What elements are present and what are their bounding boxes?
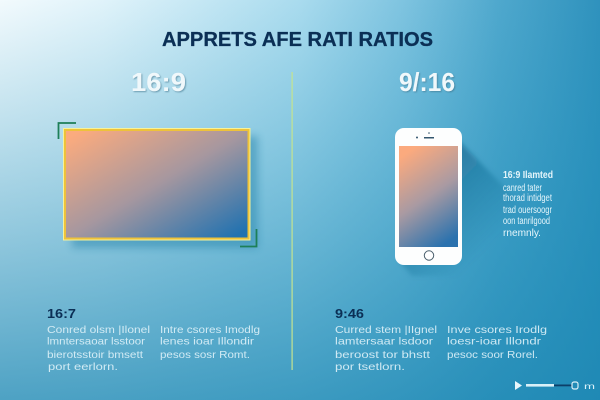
progress fill: [526, 384, 554, 387]
crop corner bottom-right: [240, 229, 256, 246]
right caption column 1: lamtersaar lsdoor: [335, 336, 434, 348]
left caption column 1: [47, 324, 150, 373]
right caption column 2: pesoc soor Rorel.: [447, 349, 538, 361]
landscape shadow: [72, 136, 258, 248]
side note: [503, 170, 553, 239]
right caption column 1: Curred stem |IIgnel: [335, 324, 437, 336]
phone screen: [399, 146, 458, 247]
side note: 16:9 Ilamted: [503, 170, 553, 181]
phone body: [395, 128, 462, 265]
phone home button: [424, 251, 434, 260]
crop corner top-left: [58, 123, 76, 139]
right caption column 2: loesr-ioar Illondr: [447, 336, 542, 348]
title: APPRETS AFE RATI RATIOS: [162, 28, 433, 51]
side note: trad ouersoogr: [503, 205, 552, 216]
heading: 9:16: 9/:16: [399, 67, 455, 97]
left caption column 2: [160, 324, 260, 361]
phone shadow: [400, 140, 522, 278]
left caption column 1: lmntersaoar lsstoor: [47, 336, 146, 348]
left caption column 2: pesos sosr Romt.: [160, 349, 250, 361]
heading: 16:9: 16:9: [131, 67, 186, 97]
side note: oon tanrilgood: [503, 216, 550, 227]
media player control: [515, 381, 596, 391]
right caption column 1: por tsetlorn.: [335, 361, 405, 373]
play icon: [515, 381, 522, 390]
right caption heading: 9:46: [335, 306, 364, 321]
phone speaker: [424, 137, 434, 138]
left caption heading: 16:7: [47, 306, 76, 321]
right caption column 2: [447, 324, 547, 361]
phone sensor: [428, 132, 430, 134]
time label: m: [584, 382, 596, 391]
left caption column 1: Conred olsm |Ilonel: [47, 324, 150, 336]
left caption column 2: lenes ioar Illondir: [160, 336, 255, 348]
left caption column 2: Intre csores Imodlg: [160, 324, 260, 336]
right caption column 1: beroost tor bhstt: [335, 349, 430, 361]
right caption column 2: Inve csores Irodlg: [447, 324, 547, 336]
progress track: [526, 384, 572, 386]
end marker: [572, 382, 578, 389]
side note: thorad intidget: [503, 193, 552, 204]
side note: rnemnly.: [503, 228, 541, 239]
landscape frame: [64, 130, 249, 239]
phone camera: [416, 136, 418, 138]
right caption column 1: [335, 324, 437, 373]
left caption column 1: port eerlorn.: [48, 361, 118, 373]
side note: canred tater: [503, 183, 542, 194]
phone: [395, 128, 522, 278]
left caption column 1: bierotsstoir bmsett: [47, 349, 143, 361]
landscape screen: [64, 128, 258, 248]
center divider: [292, 72, 293, 370]
